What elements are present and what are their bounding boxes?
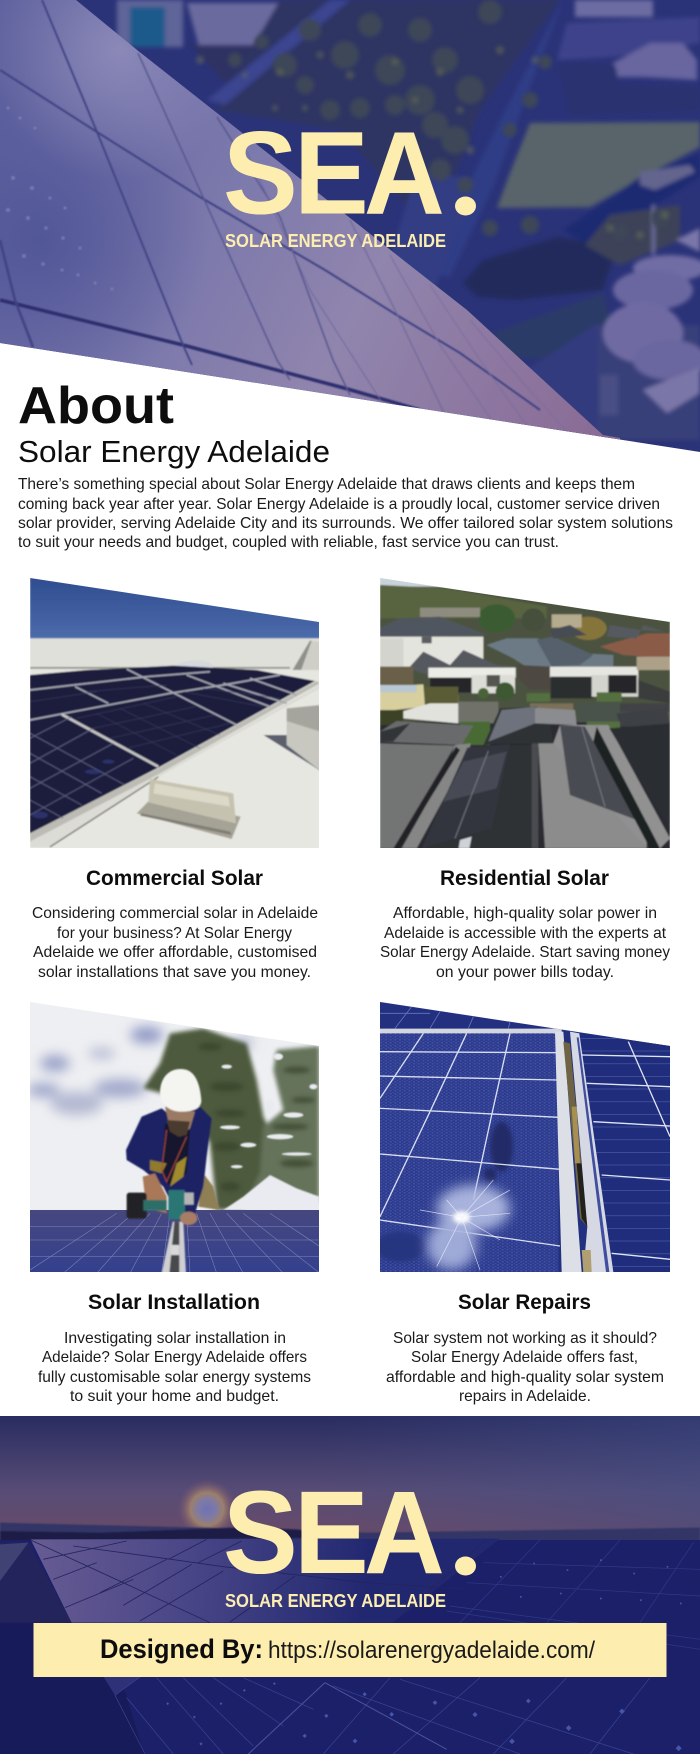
logo: footer SEA wordmark — [226, 1490, 476, 1607]
body: Commercial Solar: Adelaide we offer affordable, customised — [33, 944, 317, 961]
credit bar — [34, 1623, 666, 1677]
body: Solar Installation — [38, 1330, 311, 1405]
photo: commercial rooftop panels — [30, 575, 320, 852]
heading: Residential Solar: Residential Solar — [440, 867, 609, 890]
body: Commercial Solar: for your business? At Solar Energy — [57, 925, 292, 942]
body: Solar Repairs: repairs in Adelaide. — [459, 1388, 591, 1405]
body: Residential Solar: Adelaide is accessible with the experts at — [384, 925, 667, 942]
body: Commercial Solar: solar installations that save you money. — [38, 964, 311, 981]
panel: solar repairs card — [375, 1000, 670, 1405]
body: Residential Solar: Affordable, high-quality solar power in — [393, 905, 657, 922]
photo: cracked solar panel — [375, 1000, 670, 1273]
section: about text — [18, 377, 673, 551]
footer logo tagline: SOLAR ENERGY ADELAIDE — [225, 1591, 446, 1611]
about paragraph: to suit your needs and budget, coupled with reliable, fast service you can trust. — [18, 534, 559, 551]
photo: installer on a roof — [27, 1000, 320, 1273]
about paragraph: coming back year after year. Solar Energy Adelaide is a proudly local, customer service driven — [18, 496, 660, 513]
sunset solar field photo — [0, 1416, 700, 1754]
solar panel foreground — [0, 0, 620, 460]
panel: hero banner photo — [0, 0, 700, 460]
about paragraph — [18, 476, 673, 551]
about paragraph: There’s something special about Solar Energy Adelaide that draws clients and keeps them — [18, 476, 635, 493]
credit label: Designed By: — [100, 1634, 263, 1664]
body: Solar Installation: Adelaide? Solar Energy Adelaide offers — [42, 1349, 307, 1366]
heading: About: About — [18, 377, 174, 435]
panel: solar installation card — [27, 1000, 320, 1405]
logo letters: . — [449, 108, 481, 239]
body: Residential Solar — [380, 905, 670, 981]
body: Solar Installation: Investigating solar installation in — [64, 1330, 286, 1347]
footer logo letters: SEA — [223, 1467, 445, 1599]
body: Commercial Solar: Considering commercial solar in Adelaide — [32, 905, 318, 922]
logo: hero SEA wordmark — [223, 108, 481, 251]
panel: residential solar card — [380, 575, 670, 981]
body: Residential Solar: Solar Energy Adelaide. Start saving money — [380, 944, 670, 961]
heading: Commercial Solar: Commercial Solar — [86, 867, 263, 890]
body: Solar Installation: to suit your home and budget. — [70, 1388, 279, 1405]
body: Solar Repairs: affordable and high-quality solar system — [386, 1369, 664, 1386]
logo dot — [455, 196, 476, 216]
body: Residential Solar: on your power bills today. — [436, 964, 614, 981]
panel: commercial solar card — [30, 575, 320, 981]
footer logo letters: . — [449, 1467, 481, 1599]
panel: footer banner — [0, 1416, 700, 1754]
body: Commercial Solar — [32, 905, 318, 981]
body: Solar Repairs: Solar Energy Adelaide offers fast, — [411, 1349, 638, 1366]
photo: residential rooftops — [380, 575, 670, 855]
logo letters: SEA — [223, 108, 445, 239]
body: Solar Repairs — [386, 1330, 664, 1405]
logo tagline: SOLAR ENERGY ADELAIDE — [225, 231, 446, 251]
footer logo dot — [455, 1556, 476, 1576]
aerial city backdrop — [0, 0, 700, 460]
about paragraph: solar provider, serving Adelaide City and its surrounds. We offer tailored solar system solutions — [18, 515, 673, 532]
body: Solar Repairs: Solar system not working as it should? — [393, 1330, 657, 1347]
body: Solar Installation: fully customisable solar energy systems — [38, 1369, 311, 1386]
heading: Solar Installation: Solar Installation — [88, 1291, 260, 1314]
heading: Solar Repairs: Solar Repairs — [458, 1291, 591, 1314]
subheading: Solar Energy Adelaide — [18, 434, 330, 469]
credit url: https://solarenergyadelaide.com/ — [268, 1637, 595, 1664]
